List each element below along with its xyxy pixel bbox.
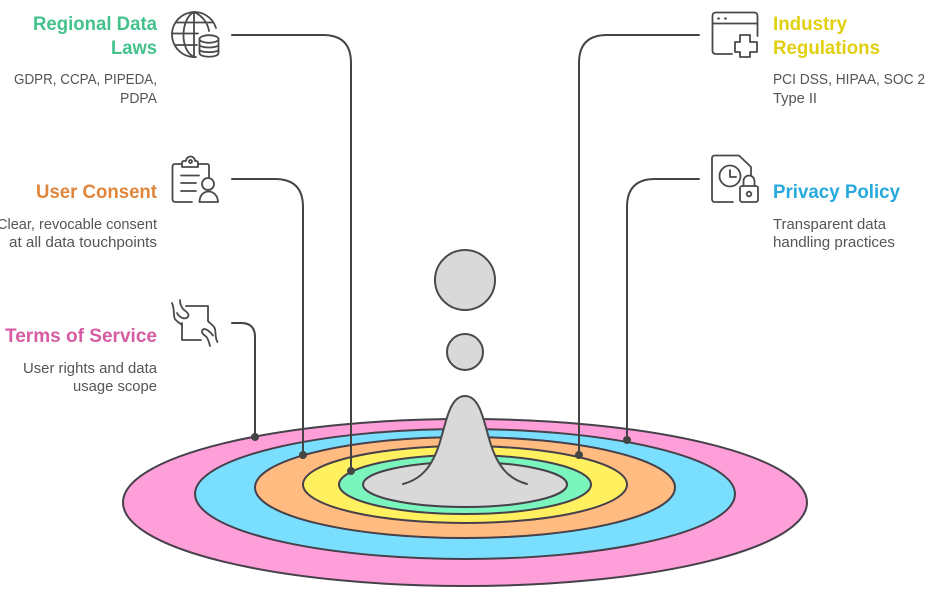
connector: regional data laws — [232, 35, 355, 475]
connector: industry regulations — [575, 35, 699, 459]
text: user consent description — [0, 217, 157, 251]
icon: document with clock and lock — [712, 156, 758, 202]
connector: terms of service — [232, 323, 259, 441]
icon: browser window with plus — [712, 12, 758, 57]
heading: privacy policy: Privacy Policy — [773, 182, 900, 203]
heading: regional data laws — [33, 14, 157, 59]
text: privacy policy description: Transparent data — [773, 217, 887, 233]
text: terms of service description — [23, 361, 158, 395]
text: terms of service description: User rights and data — [23, 361, 158, 377]
heading: industry regulations — [773, 14, 880, 59]
text: industry regulations description: Type II — [773, 91, 817, 107]
text: industry regulations description: PCI DSS, HIPAA, SOC 2 — [773, 72, 925, 88]
text: industry regulations description — [773, 72, 925, 107]
heading: regional data laws: Laws — [111, 38, 157, 59]
heading: regional data laws: Regional Data — [33, 14, 157, 35]
icon: hands holding tablet — [172, 300, 218, 346]
large droplet — [435, 250, 495, 310]
ring: user consent — [255, 437, 675, 538]
ring: privacy policy — [195, 429, 735, 559]
heading: industry regulations: Industry — [773, 14, 847, 35]
icon: clipboard with user — [172, 156, 218, 202]
ring: core — [363, 462, 567, 507]
connector: privacy policy — [623, 179, 699, 444]
heading: terms of service: Terms of Service — [5, 326, 157, 347]
droplet peak — [403, 396, 527, 484]
text: user consent description: Clear, revocable consent — [0, 217, 157, 233]
text: terms of service description: usage scope — [73, 379, 157, 395]
small droplet — [447, 334, 483, 370]
connector: user consent — [232, 179, 307, 459]
icon: globe with database — [172, 12, 218, 57]
text: regional data laws description: PDPA — [120, 91, 157, 107]
text: privacy policy description: handling practices — [773, 235, 895, 251]
text: regional data laws description — [14, 72, 157, 107]
text: user consent description: at all data touchpoints — [9, 235, 157, 251]
text: regional data laws description: GDPR, CCPA, PIPEDA, — [14, 72, 157, 88]
ring: industry regulations — [303, 446, 627, 523]
heading: industry regulations: Regulations — [773, 38, 880, 59]
ring: regional data laws — [339, 455, 591, 514]
ring: terms of service — [123, 419, 807, 586]
heading: user consent: User Consent — [36, 182, 158, 203]
text: privacy policy description — [773, 217, 895, 251]
concentric rings diagram — [123, 419, 807, 586]
